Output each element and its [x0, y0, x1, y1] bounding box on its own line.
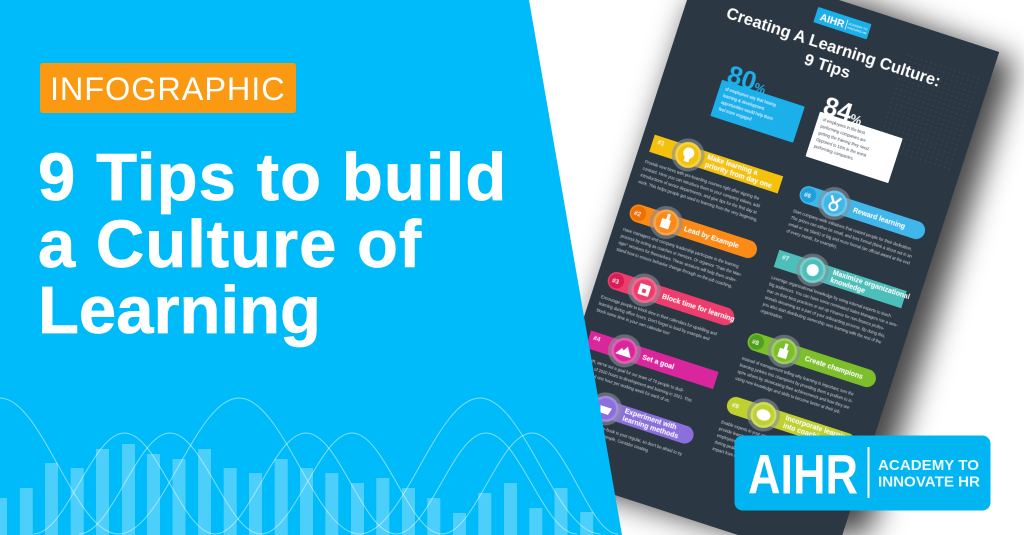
tip 6 text: of every month, for example). [786, 228, 838, 249]
tip 1 heading: priority from day one [704, 162, 773, 190]
AIHR logo badge: INNOVATE HR [878, 474, 980, 490]
stat card: 80%: of employees say that having [725, 86, 777, 108]
tip 9 icon: speech bubbles [743, 394, 784, 436]
tip 8 [735, 324, 881, 422]
tip 6 banner [797, 184, 927, 241]
stat card: 80%: 80% [724, 59, 772, 100]
tip 4 heading: Set a goal [641, 354, 675, 371]
AIHR logo badge: AIHR [748, 442, 858, 506]
tip 7 heading: Maximize organizational [832, 270, 910, 301]
tip 8 number [747, 333, 766, 352]
tip 9 [712, 388, 860, 492]
main heading: a Culture of [38, 207, 422, 282]
tip 4 text: At AIHR, we've set a goal for our team of 70 people to dedi- [581, 355, 685, 393]
tip 8 text: spire others by showcasing their achievements and how they are [737, 369, 851, 410]
poster background [535, 0, 999, 535]
tip 5 heading: Experiment with [624, 408, 677, 431]
tip 7 text: organization. [760, 308, 784, 320]
tip 3 text: block some time in your own calendar too! [596, 307, 670, 336]
tip 3 icon: calendar [623, 269, 665, 311]
tip 9 text: provide learning, and support employees [718, 426, 790, 454]
tip 2 text: ager” sessions for themselves. These sessions will help them under- [618, 240, 738, 283]
tip 5 [557, 381, 698, 472]
tip 3 text: Encourage people to block time in their calendars for upskilling and [600, 294, 718, 337]
wave lines decoration [0, 398, 618, 534]
tip 6 icon: medal [814, 183, 855, 224]
tip 8 heading: Create champions [804, 356, 864, 381]
tip 7 number: #7 [781, 254, 790, 263]
stat card: 84%: getting the training they need. [818, 130, 871, 152]
tip 4 text: cate 5% of 2020 hours to development and learning in 2021. This [578, 362, 692, 403]
tip 6 [786, 176, 930, 274]
tip 1 text: work. This helps people get used to learning from the very beginning. [638, 179, 758, 222]
tip 3 heading: Block time for learning [661, 293, 735, 324]
tip 2 text: stand how to ensure behavior change through on-the-job coaching. [616, 247, 733, 289]
main heading [38, 140, 507, 348]
bar chart decoration [0, 444, 593, 535]
tip 1 banner [649, 135, 783, 193]
tip 6 text: Start company-wide initiatives that reward people for their dedication. [792, 208, 913, 252]
tip 5 heading: learning methods [621, 416, 679, 440]
tip 9 text: impact from learning. [712, 446, 750, 463]
tip 3 banner [605, 270, 736, 328]
poster logo: INNOVATE HR [847, 25, 868, 36]
tip 2 text: process by acting as coaches or mentors. Or organize “Train the Man- [620, 233, 743, 277]
tip 4 icon: mountain flag [604, 330, 645, 372]
tip 7 icon: brain [792, 249, 833, 291]
tip 2 number [629, 204, 648, 223]
tip 2 text: Have managers and company leadership participate in the learning [622, 227, 740, 269]
category label [40, 63, 296, 113]
tip 1 number: #1 [656, 139, 666, 148]
tip 4 banner [586, 331, 719, 389]
tip 5 banner [567, 389, 696, 446]
tip 2 icon: pointing hand [645, 202, 687, 243]
poster shadow [542, 0, 1016, 535]
tip 8 text: Instead of management telling why learning is important, turn the [741, 356, 855, 397]
tip 2 heading: Lead by Example [683, 226, 740, 250]
tip 8 icon: raised hand [763, 330, 805, 372]
tip 9 heading: into coaching [782, 423, 827, 443]
tip 7 text: inar on their best practices or set up Finance for non-finance profes- [766, 288, 886, 331]
tip 9 number: #9 [731, 402, 740, 411]
tip 7 text: Leverage organizational knowledge by using internal experts to teach [771, 275, 892, 319]
tip 1 icon: light bulb [667, 134, 709, 176]
tip 7 banner [774, 250, 907, 308]
poster title: 9 Tips [802, 51, 853, 82]
category label: INFOGRAPHIC [50, 71, 286, 107]
stat card: 80%: opportunities would help them [720, 100, 774, 121]
tip 2 banner [627, 202, 759, 260]
tip 6 number: #6 [803, 191, 812, 200]
tip 4 [576, 323, 721, 415]
stat card: 84%: of employees in the best [822, 117, 867, 136]
tip 9 text: during peak moments for maximum [714, 439, 777, 464]
tip 4 number: #4 [592, 335, 602, 344]
main heading: Learning [38, 273, 321, 348]
poster logo [813, 7, 872, 39]
AIHR logo badge: ACADEMY TO [878, 457, 979, 474]
infographic poster content [557, 0, 988, 522]
tip 9 text: Enable experts in your organization to [721, 419, 788, 446]
tip 8 number: #8 [751, 339, 760, 347]
tip 1 heading: Make learning a [706, 154, 758, 177]
poster logo: AIHR [818, 11, 846, 31]
AIHR logo badge [734, 436, 990, 510]
stat card: 84%: performing companies are [820, 124, 867, 143]
main heading: 9 Tips to build [38, 140, 507, 215]
tip 1 text: Provide new hires with pre-boarding courses right after signing the [644, 159, 761, 201]
tip 5 text: different content types [557, 426, 597, 443]
tip 4 text: adds about one hour per working week for each of us. [576, 368, 671, 403]
tip 5 icon: lab flask [585, 388, 626, 430]
tip 6 text: email or via Slack) or big and more formal (an official award at the end [788, 222, 911, 266]
tip 6 number [799, 186, 818, 205]
tip 9 text: employees during peak moments [716, 433, 775, 456]
tip 3 number: #3 [611, 277, 620, 286]
stat card: 80%: learning & development [723, 93, 766, 111]
tip 1 text: introductions of senior departments, and give tips for the first day at [640, 172, 758, 215]
tip 7 [759, 243, 913, 355]
tip 6 heading: Reward learning [852, 207, 906, 231]
stat card: 84%: Opposed to 16% in the worst [815, 137, 868, 158]
poster logo: ACADEMY TO [848, 22, 869, 32]
tip 8 text: using new knowledge and skills to become better at their job. [735, 376, 841, 414]
tip 5 text: what works best for your people. Consider creating [560, 420, 649, 453]
tip 3 number [607, 272, 626, 290]
tip 7 text: big audiences. You can have some nominated Sales Managers run a sem- [769, 281, 899, 328]
stat card: 84%: performing companies. [813, 144, 854, 161]
stat card: 84%: 84% [820, 90, 868, 131]
blue panel [0, 0, 622, 535]
stat card: 80% [710, 58, 812, 143]
stat card: 80%: feel more engaged [718, 106, 753, 122]
tip 1 text: contract. Here you can introduce them to your company values, add [642, 166, 761, 209]
tip 9 heading: Incorporate learning [784, 415, 851, 443]
tip 1 [638, 127, 786, 226]
tip 2 [616, 195, 762, 293]
tip 2 number: #2 [633, 210, 642, 219]
poster title: Creating A Learning Culture: [724, 4, 943, 91]
tip 8 text: learning junkies into champions by providing them a podium to in- [739, 362, 854, 404]
tip 7 text: sionals streaming as a part of your onboarding process. By doing this, [764, 295, 886, 339]
tip 8 banner [745, 331, 878, 389]
tip 7 text: you also start distributing ownership over learning with the rest of the [762, 301, 883, 345]
tip 7 heading: knowledge [829, 277, 866, 295]
tip 3 [596, 262, 740, 354]
tip 9 banner [725, 395, 858, 453]
tip 3 text: learning during office hours. Don't forget to lead by example and [598, 301, 711, 342]
tip 5 text: Microlearning, video or e-book is your regular, so don't be afraid to try [562, 413, 684, 457]
stat card: 84% [805, 90, 910, 183]
tip 6 text: The prizes can either be small, and less formal (think a shout out in an [790, 215, 913, 259]
